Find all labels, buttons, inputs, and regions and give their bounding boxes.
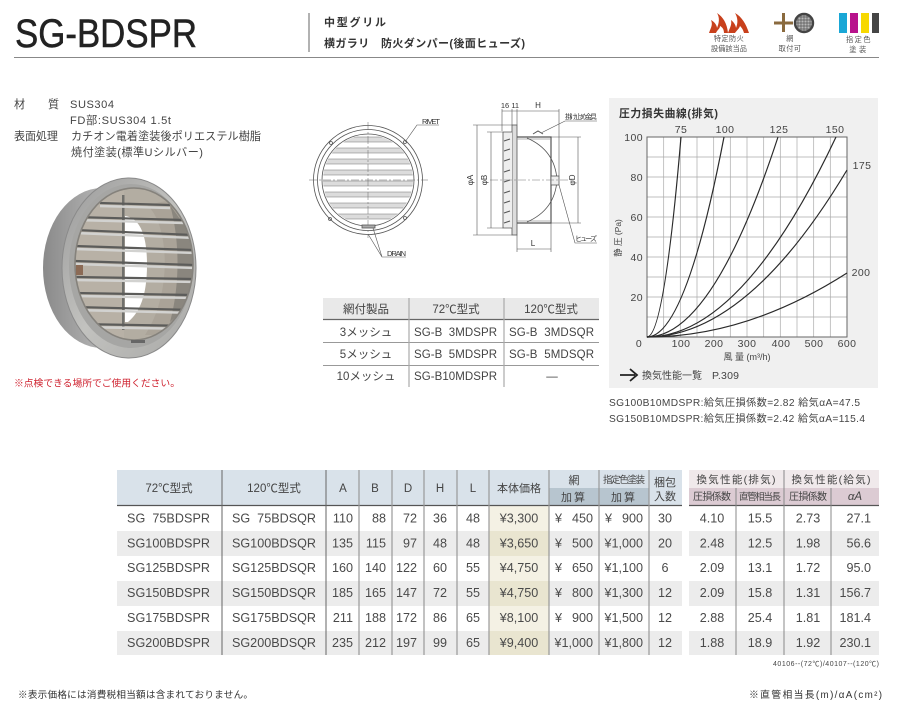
drawing: side view: H [535,101,541,110]
main table headings [145,473,676,504]
row: SG 75: ¥3,300 [499,512,538,526]
note: inspection: ※点検できる場所でご使用ください。 [14,376,180,390]
row: SG175 [127,611,672,625]
row: SG125: 160 [332,561,353,575]
main table headings: 加算 [561,490,587,504]
row: SG 75: 30 [658,512,672,526]
text block: material and finish: 表面処理 [14,130,58,143]
row: SG200: 65 [466,636,480,650]
performance rows: 12.5 [748,536,772,550]
product photo [43,178,196,358]
mesh table rows: SG-B 3MDSQR [509,327,594,339]
subtitle: 中型グリル [324,15,386,29]
performance rows: 156.7 [839,586,871,600]
row: SG125: ¥1,100 [603,561,643,575]
row: SG125 [127,561,669,575]
performance headings [693,473,870,503]
arrow and reference [620,369,739,382]
performance headings: αA [848,491,862,503]
x axis labels [672,338,856,362]
row: SG175: 12 [658,611,672,625]
row: SG150 [127,586,672,600]
main table headings: 加算 [611,490,637,504]
performance rows: 95.0 [846,561,871,575]
drawing: side view [466,101,597,252]
icon: net attachable: 取付可 [779,44,801,53]
y axis labels: 40 [631,252,643,264]
table: mesh products [323,298,599,387]
performance rows: 2.48 [700,536,724,550]
row: SG150: 55 [466,586,480,600]
row: SG125: 55 [466,561,480,575]
mesh table rows: SG-B10MDSPR [414,371,497,383]
row: SG125: SG125BDSPR [127,561,210,575]
row: SG150: 185 [332,586,353,600]
price column [489,506,549,655]
row: SG175: SG175BDSPR [127,611,210,625]
icon: net attachable [774,13,813,53]
row: SG 75: SG 75BDSPR [127,512,210,526]
row: SG 75: 900 [622,512,643,526]
mesh table rows: ― [546,371,558,383]
icon: colour coating [839,13,879,54]
mesh table rows: SG-B 3MDSPR [414,327,497,339]
drawing: front view: RIVET [422,117,440,126]
drawing: side view: φA [466,174,475,185]
performance rows: 230.1 [839,636,871,650]
main table headings: 網 [568,473,580,487]
row: SG150: ¥ [554,586,563,600]
chart curves [647,137,847,337]
row: SG150: ¥1,300 [603,586,643,600]
row: SG125: 60 [433,561,447,575]
text block: material and finish [14,97,261,159]
row: SG150: 147 [396,586,417,600]
row: SG100: SG100BDSQR [232,536,316,550]
row: SG100: 48 [466,536,480,550]
y axis labels: 静 圧 (Pa) [613,219,623,257]
curve labels: 150 [826,124,844,136]
coefficient notes: SG100B10MDSPR:給気圧損係数=2.82 給気αA=47.5 [609,396,860,409]
row: SG 75: 88 [372,512,386,526]
performance rows: 1.98 [796,536,820,550]
row: SG 75: 72 [403,512,417,526]
x axis labels: 600 [838,338,856,350]
row: SG200: ¥1,000 [553,636,593,650]
performance rows: 56.6 [846,536,871,550]
row: SG100: 500 [572,536,593,550]
performance rows [700,512,871,650]
row: SG100: 20 [658,536,672,550]
main table headings: 梱包 [654,475,676,489]
row: SG150: 72 [433,586,447,600]
performance rows: 1.92 [796,636,820,650]
drawing: side view: φD [568,174,577,185]
row: SG125: ¥4,750 [499,561,538,575]
row: SG200: 197 [396,636,417,650]
x axis labels: 500 [805,338,823,350]
performance rows: 27.1 [846,512,871,526]
main table headings: L [470,483,477,495]
main table headings: 入数 [654,490,676,503]
row: SG 75: 450 [572,512,593,526]
row: SG150: SG150BDSQR [232,586,316,600]
icon: fire equipment: 特定防火 [714,34,744,43]
main table header backgrounds [117,470,682,505]
row: SG 75: 110 [333,512,353,526]
row: SG100 [127,536,672,550]
y axis labels: 0 [636,338,642,350]
y axis labels [613,132,643,350]
performance headings: 直管相当長 [739,491,781,503]
icon: colour coating: 塗装 [849,45,869,54]
row: SG100: 135 [332,536,353,550]
drawing: side view: 掛け止め金具 [565,112,597,121]
coefficient notes [609,396,865,425]
row: SG 75: ¥ [554,512,563,526]
icon: net attachable: 網 [786,34,794,43]
x axis labels: 100 [672,338,690,350]
footnote: tax: ※表示価格には消費税相当額は含まれておりません。 [18,689,253,701]
performance rows: 1.31 [796,586,820,600]
mesh table rows: 10メッシュ [337,371,395,383]
chart title: 圧力損失曲線(排気) [619,106,718,120]
text block: material and finish: 材 [14,97,25,111]
row: SG 75: 48 [466,512,480,526]
table: main specification [117,470,682,655]
performance rows: 1.81 [796,611,820,625]
curve labels: 100 [716,124,734,136]
y axis labels: 100 [624,132,643,144]
performance rows: 2.09 [700,586,724,600]
mesh table header: 120℃型式 [524,302,578,316]
row: SG200: ¥1,800 [603,636,643,650]
performance rows: 4.10 [700,512,724,526]
performance rows: 15.8 [748,586,772,600]
y axis labels: 20 [631,292,643,304]
curve labels: 125 [770,124,788,136]
text block: material and finish: カチオン電着塗装後ポリエステル樹脂 [71,129,261,143]
row: SG100: ¥ [554,536,563,550]
drawing: side view: 16 11 [501,101,519,110]
x axis labels: 200 [705,338,723,350]
y axis labels: 60 [631,212,643,224]
main table headings: 本体価格 [497,481,541,495]
row: SG175: 211 [333,611,353,625]
row: SG175: ¥1,500 [603,611,643,625]
chart panel: pressure loss curve [609,98,878,388]
drawing: side view: L [531,239,536,248]
subtitle: 横ガラリ 防火ダンパー(後面ヒューズ) [324,36,525,50]
row: SG100: SG100BDSPR [127,536,210,550]
row: SG175: 65 [466,611,480,625]
row: SG200: SG200BDSPR [127,636,210,650]
performance headings: 換気性能(排気) [696,473,776,486]
mesh table rows: SG-B 5MDSPR [414,349,497,361]
row: SG150: ¥4,750 [499,586,538,600]
row: SG100: 115 [366,536,386,550]
main table headings: B [371,483,379,495]
drawing: side view: φB [480,175,489,185]
mesh table rows: 3メッシュ [340,327,392,339]
row: SG150: 165 [365,586,386,600]
table: ventilation performance [689,470,879,655]
footnote: units: ※直管相当長(m)/αA(cm²) [749,688,882,701]
row: SG 75: 36 [433,512,447,526]
performance rows: 25.4 [748,611,772,625]
performance headings: 換気性能(給気) [792,473,870,486]
row: SG 75 [127,512,672,526]
row: SG100: 48 [433,536,447,550]
icon: colour coating: 指定色 [846,35,872,44]
x axis labels: 風 量 (m³/h) [724,352,770,362]
performance headings: 圧損係数 [789,490,827,503]
row: SG150: 800 [572,586,593,600]
title: SG-BDSPR [15,12,197,56]
main table headings: H [436,483,444,495]
performance rows: 15.5 [748,512,772,526]
performance rows: 1.72 [796,561,820,575]
arrow and reference: P.309 [712,370,739,382]
main table headings: 72℃型式 [145,481,193,495]
row: SG 75: SG 75BDSQR [232,512,316,526]
row: SG175: 188 [365,611,386,625]
header rule [14,56,879,58]
text block: material and finish: SUS304 [70,99,114,111]
row: SG100: ¥3,650 [499,536,538,550]
row: SG125: 650 [572,561,593,575]
x axis labels: 400 [772,338,790,350]
row: SG200: 212 [365,636,386,650]
main table headings: 120℃型式 [247,481,301,495]
main table headings: D [404,483,412,495]
row: SG125: 122 [396,561,417,575]
row: SG125: 6 [661,561,669,575]
row: SG200: 12 [658,636,672,650]
coefficient notes: SG150B10MDSPR:給気圧損係数=2.42 給気αA=115.4 [609,412,865,425]
text block: material and finish: FD部:SUS304 1.5t [70,114,171,127]
x axis labels: 300 [738,338,756,350]
main table headings: A [339,483,347,495]
performance rows: 181.4 [839,611,871,625]
row: SG150: SG150BDSPR [127,586,210,600]
curve labels: 75 [675,124,687,136]
performance rows: 2.73 [796,512,820,526]
drawing: side view: ヒューズ [575,234,597,243]
main table headings: 指定色塗装 [603,474,645,486]
row: SG175: 900 [572,611,593,625]
row: SG175: 86 [433,611,447,625]
mesh table rows [337,327,594,383]
chart grid [647,137,847,337]
row: SG100: 97 [403,536,417,550]
row: SG175: SG175BDSQR [232,611,316,625]
row: SG175: 172 [396,611,417,625]
icon: fire equipment: 設備該当品 [711,44,747,53]
row: SG200: ¥9,400 [499,636,538,650]
icon: fire equipment [709,13,749,53]
row: SG175: ¥8,100 [499,611,538,625]
y axis labels: 80 [631,172,643,184]
drawing: front view: DRAIN [387,249,406,258]
row: SG175: ¥ [554,611,563,625]
row: SG 75: ¥ [604,512,613,526]
curve labels: 175 [853,160,871,172]
text block: material and finish: 質 [48,97,59,111]
mesh table header: 網付製品 [343,302,389,316]
performance headings: 圧損係数 [693,490,731,503]
mesh table header [343,302,578,316]
performance rows: 2.09 [700,561,724,575]
mesh table header: 72℃型式 [432,302,480,316]
row: SG150: 12 [658,586,672,600]
mesh table rows: SG-B 5MDSQR [509,349,594,361]
mesh table rows: 5メッシュ [340,349,392,361]
subtitle [324,15,525,50]
curve labels [675,124,871,279]
curve labels: 200 [852,267,870,279]
text block: material and finish: 焼付塗装(標準Uシルバー) [71,145,203,159]
performance rows: 2.88 [700,611,724,625]
row: SG200: 99 [433,636,447,650]
row: SG100: ¥1,000 [603,536,643,550]
performance rows: 1.88 [700,636,724,650]
product code note: 40106--(72℃)/40107--(120℃) [773,660,879,668]
performance rows: 18.9 [748,636,772,650]
drawing: front view [309,117,440,258]
performance rows: 13.1 [748,561,772,575]
row: SG200: SG200BDSQR [232,636,316,650]
row: SG125: SG125BDSQR [232,561,316,575]
arrow and reference: 換気性能一覧 [642,369,702,382]
row: SG200: 235 [332,636,353,650]
row: SG125: ¥ [554,561,563,575]
row: SG200 [127,636,672,650]
row: SG125: 140 [365,561,386,575]
row stripes [117,531,682,655]
